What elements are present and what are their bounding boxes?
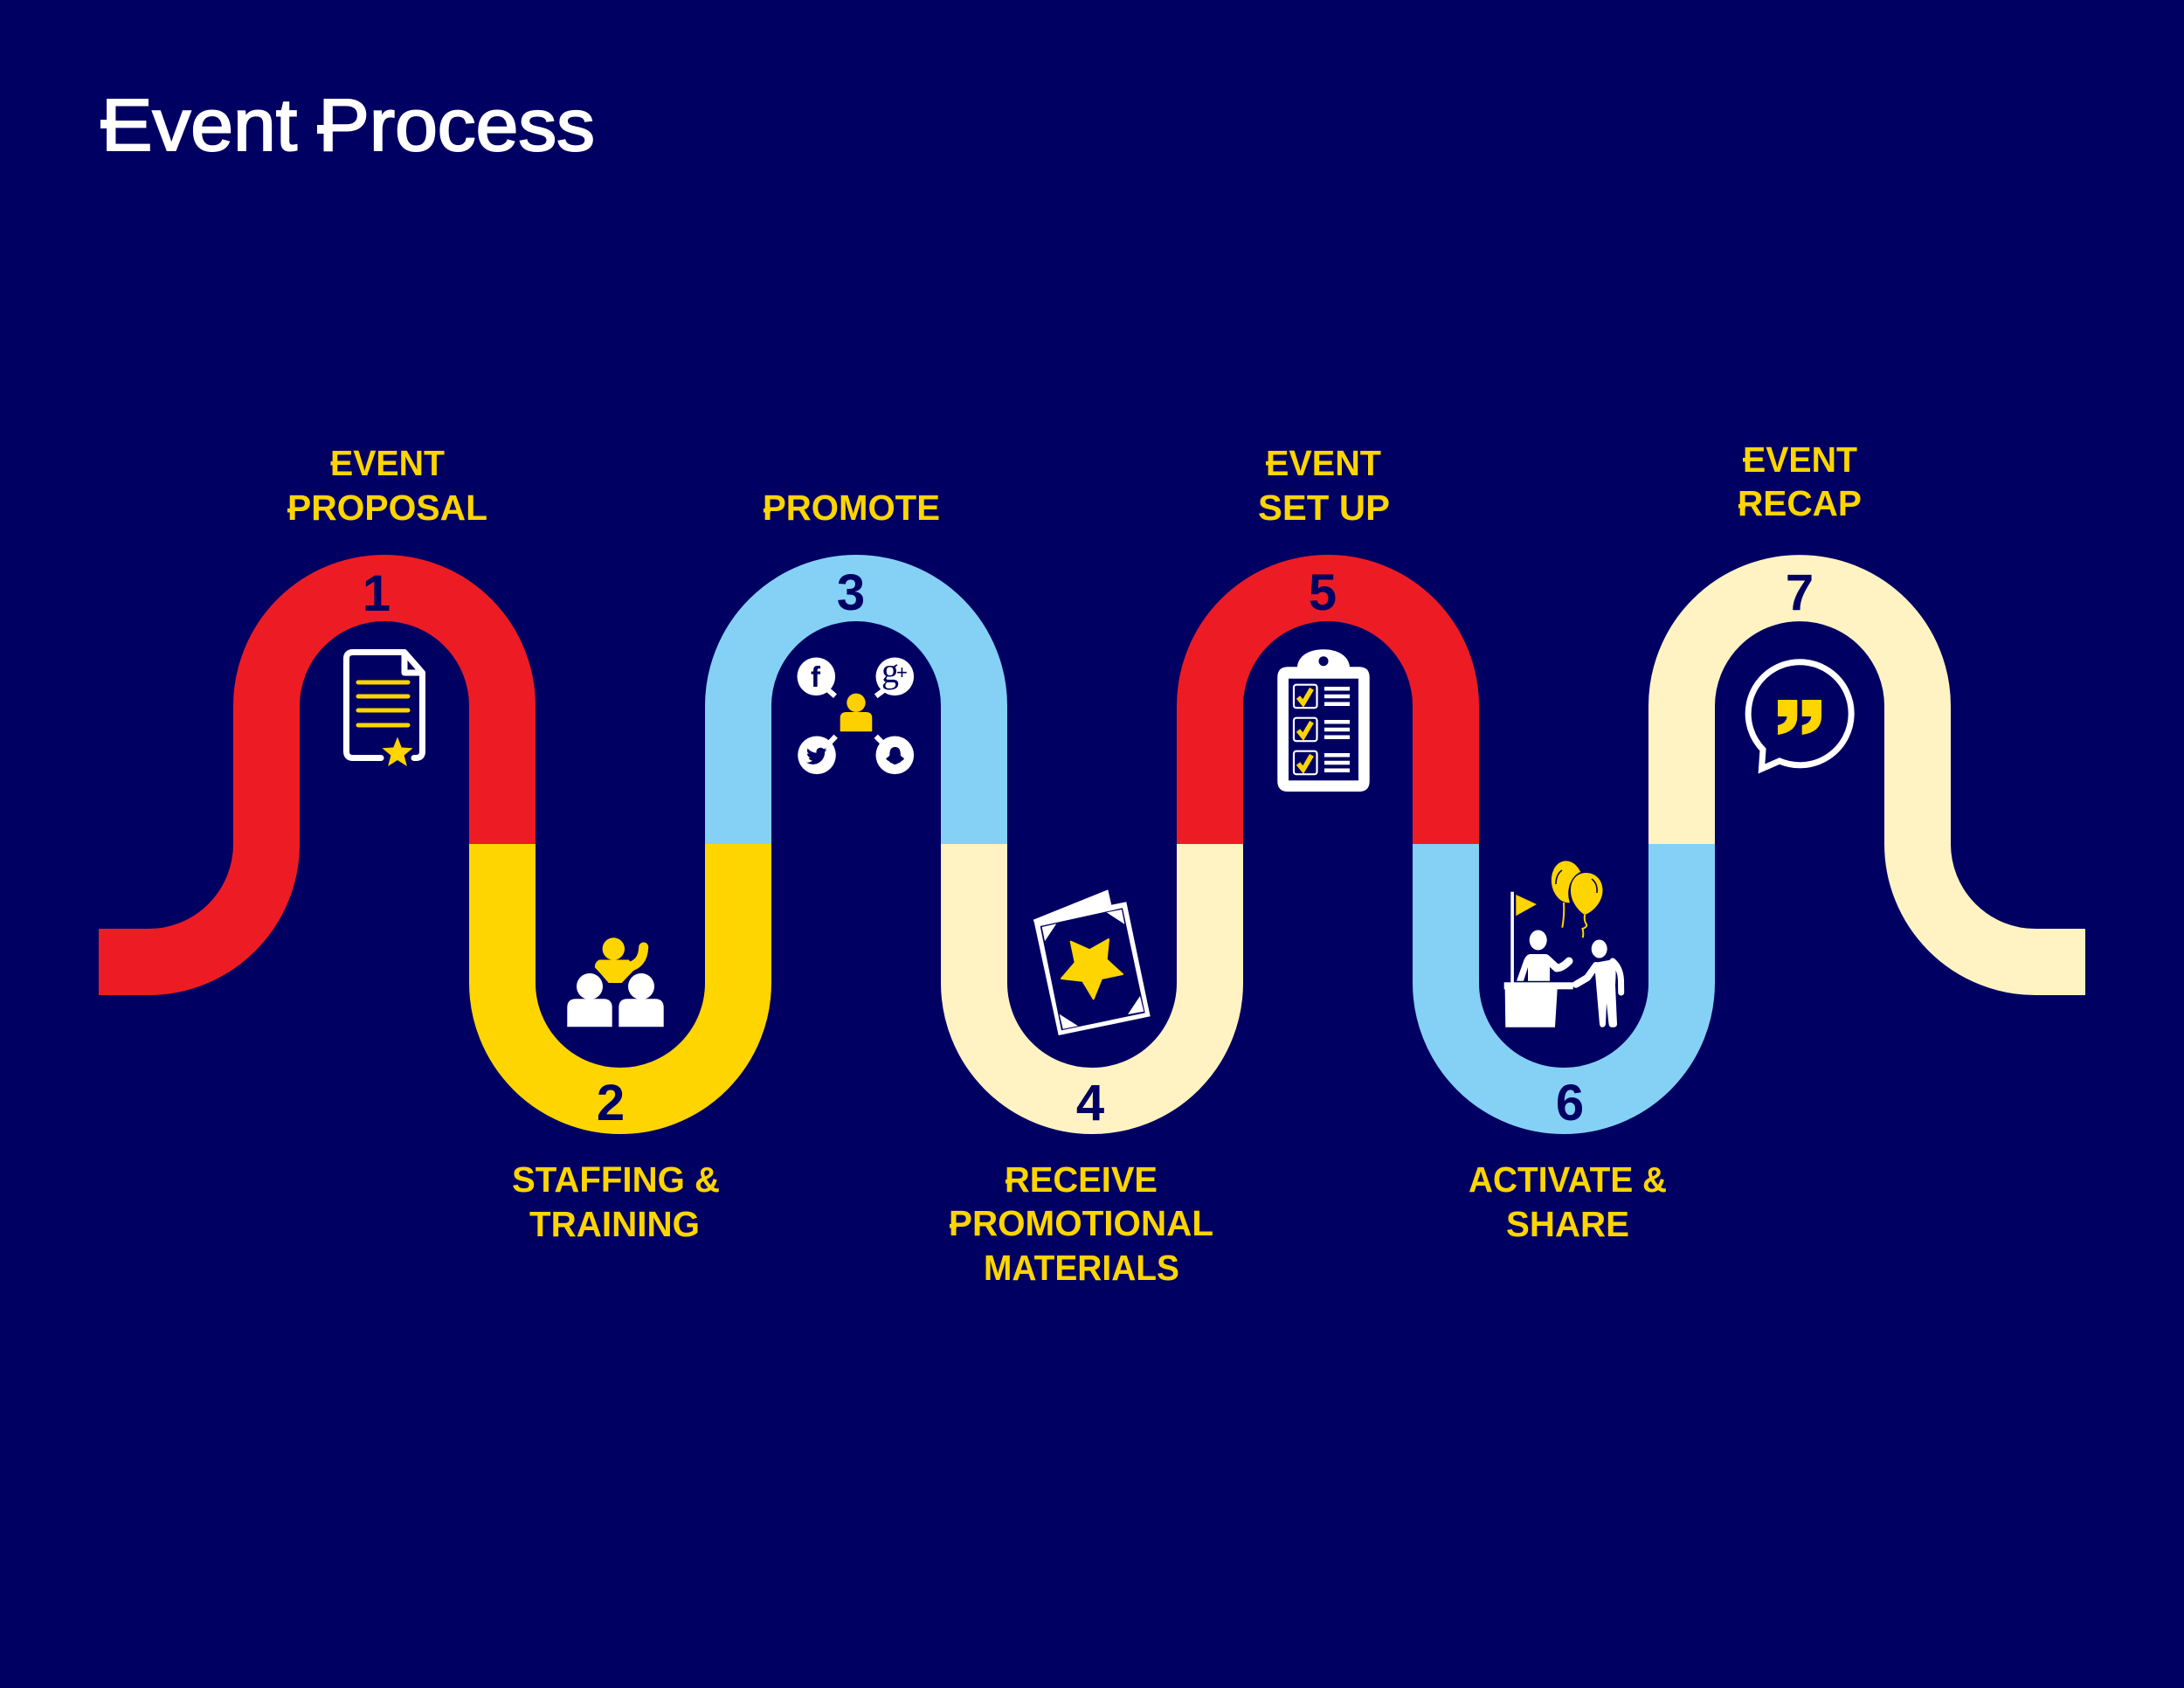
step number 7: 7: [1786, 564, 1814, 621]
icon: trainer and two trainees: [567, 937, 664, 1027]
label: event proposal: PROPOSAL: [287, 488, 487, 528]
step number 5: 5: [1309, 564, 1337, 621]
icon: social network around a person: [797, 651, 914, 774]
label: receive promotional materials: [949, 1159, 1213, 1288]
step number 2: 2: [597, 1075, 625, 1131]
label: receive promotional materials: MATERIALS: [984, 1248, 1179, 1288]
label: staffing and training: [512, 1159, 720, 1244]
label: event recap: RECAP: [1738, 483, 1862, 523]
icon: social network around a person: g: [881, 651, 899, 690]
icon: event booth with balloons: [1504, 859, 1621, 1027]
step number 4: 4: [1076, 1075, 1104, 1131]
label: promote: PROMOTE: [763, 488, 940, 528]
step number 1: 1: [363, 565, 390, 622]
icon: checklist clipboard: [1277, 649, 1370, 792]
road segment 5: red: [1210, 588, 1446, 844]
label: staffing and training: TRAINING: [529, 1204, 700, 1244]
label: event set up: SET UP: [1258, 488, 1390, 528]
road segment 1: red: [99, 588, 502, 962]
label: event recap: [1738, 439, 1862, 523]
icon: promotional card with star: [1033, 889, 1151, 1035]
label: event set up: [1258, 443, 1390, 528]
title: Event Process: [101, 84, 595, 166]
road segment 6: light blue: [1446, 844, 1682, 1101]
icon: proposal document with star: [346, 652, 423, 766]
step number 6: 6: [1556, 1075, 1584, 1131]
label: event recap: EVENT: [1743, 439, 1857, 480]
road segment 7: cream: [1682, 588, 2085, 962]
road segment 2: yellow: [502, 844, 738, 1101]
step number 3: 3: [837, 564, 865, 621]
label: event proposal: EVENT: [330, 443, 445, 483]
label: event proposal: [287, 443, 487, 528]
icon: social network around a person: +: [896, 661, 908, 683]
label: activate and share: [1469, 1159, 1667, 1244]
label: receive promotional materials: RECEIVE: [1005, 1159, 1158, 1200]
road segment 4: cream: [974, 844, 1210, 1101]
label: event set up: EVENT: [1266, 443, 1381, 483]
winding road: seven coloured segments: [99, 588, 2085, 1101]
label: receive promotional materials: PROMOTIONAL: [949, 1203, 1213, 1243]
label: activate and share: SHARE: [1506, 1204, 1629, 1244]
label: activate and share: ACTIVATE &: [1469, 1159, 1667, 1200]
label: staffing and training: STAFFING &: [512, 1159, 720, 1200]
icon: speech bubble with quotation marks: [1748, 662, 1851, 769]
road segment 3: light blue: [738, 588, 974, 844]
icon: social network around a person: f: [811, 661, 821, 693]
